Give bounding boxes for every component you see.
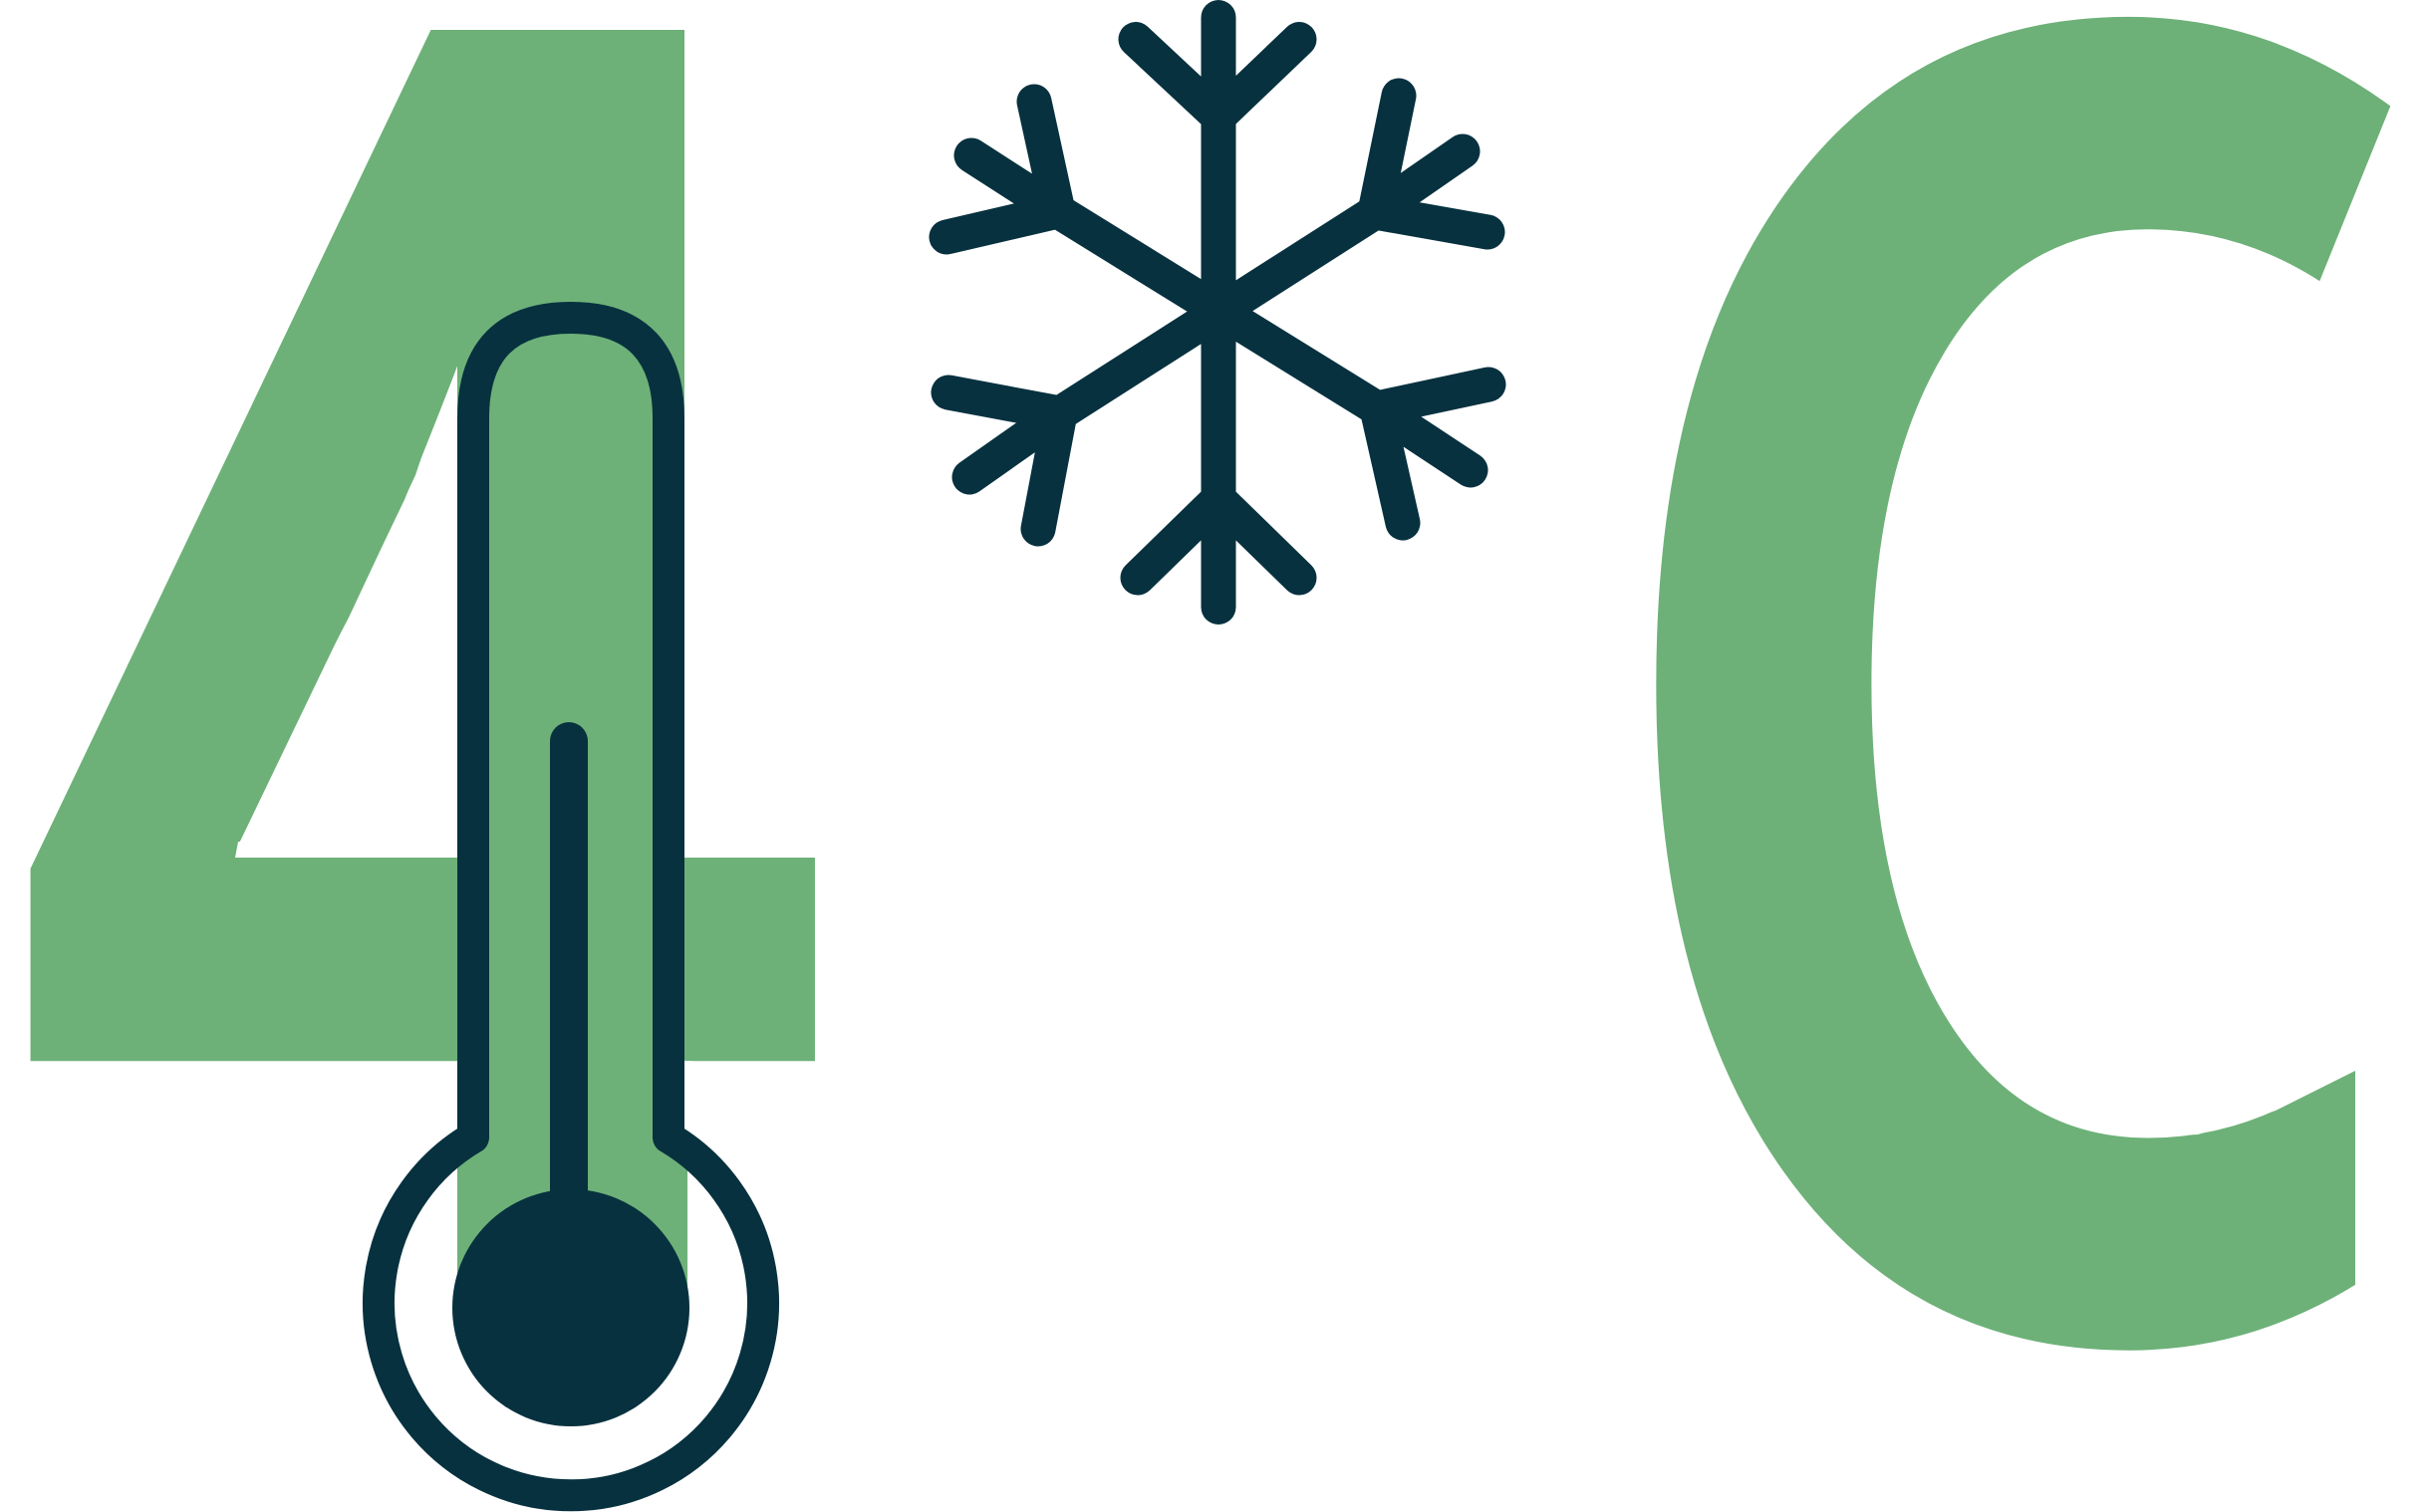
- thermometer tube and bulb outline: [379, 318, 763, 1495]
- thermometer bulb: [452, 1189, 689, 1426]
- icon: snowflake: [946, 18, 1488, 608]
- icon: thermometer: [379, 318, 763, 1495]
- thermometer mercury column: [550, 741, 588, 1295]
